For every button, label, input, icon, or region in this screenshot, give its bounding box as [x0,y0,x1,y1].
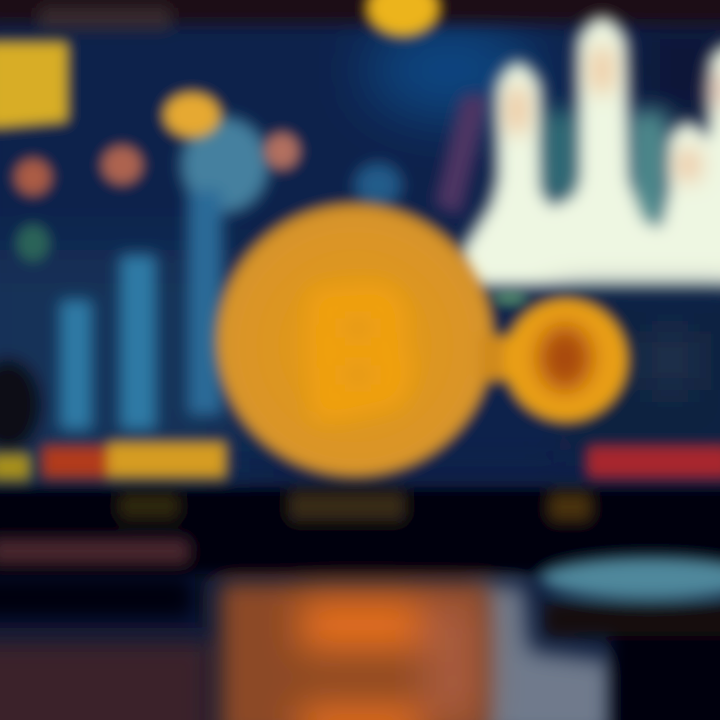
band: red ticker at right [587,446,720,478]
table surface: dark left side [0,575,210,720]
band: black base strip [0,488,720,574]
orange highlights [300,600,480,720]
reflection: orange coin glow [220,582,488,720]
chart: purple line behind white peaks [435,95,490,215]
icons: small orange and green dots [14,132,300,262]
icon: yellow sign at top left [0,42,68,128]
coin symbol [310,285,410,420]
top dark band [0,0,720,30]
chart: dark panel under peaks [560,300,720,450]
small coin centre [539,326,591,390]
chart: blue cluster and columns [60,117,402,430]
platform: teal disc at lower right [540,557,720,720]
reflection: grey-blue column [478,585,612,720]
icon: small coin [480,298,628,422]
peach tints on peaks [505,48,720,180]
caption smudges [0,490,592,566]
background: navy upper panel [0,0,720,500]
icon: large bitcoin coin [216,203,494,477]
band: yellow and red ticker at left [0,442,226,480]
chart: white peaks at right [460,18,720,286]
icon: yellow glow at top centre [367,0,439,36]
dark shape at far left [0,360,40,450]
chart: teal gaps between peaks [540,110,668,230]
green glint under peaks [492,292,528,304]
icon: gold floating dot [163,92,221,138]
